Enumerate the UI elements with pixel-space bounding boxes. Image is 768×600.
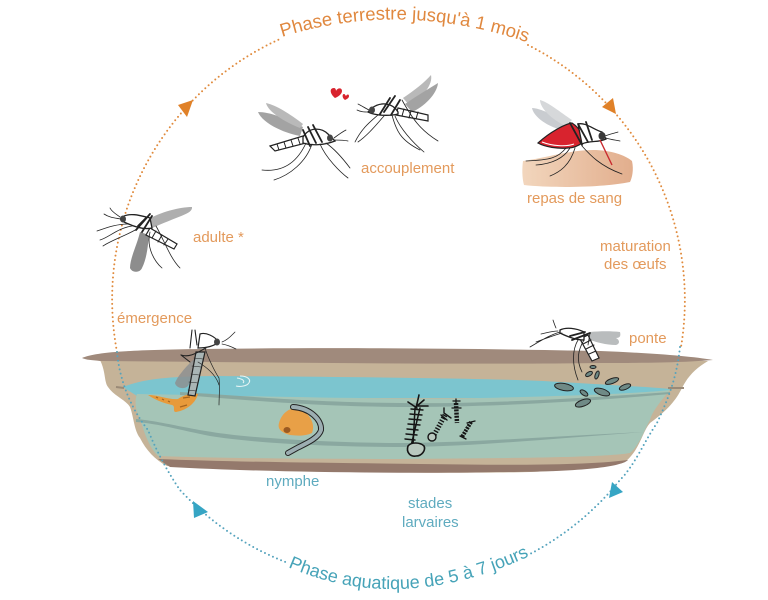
heading: aquatic phase: Phase aquatique de 5 à 7 jours [289, 548, 528, 593]
basin body [100, 360, 708, 473]
water surface [123, 376, 670, 398]
icon: mosquito left mating [258, 103, 350, 180]
label: maturation des œufs: maturation [600, 238, 671, 255]
basin lower edge [158, 459, 628, 473]
icon: mosquito adult [97, 207, 192, 272]
icon: mosquito laying eggs [530, 320, 620, 380]
arrow: orange top left [178, 100, 193, 117]
bank marks [116, 387, 684, 388]
larva medium [428, 408, 451, 441]
panel: water basin [82, 348, 713, 473]
aquatic phase dotted arc [117, 347, 680, 563]
basin rim [82, 348, 713, 364]
icon: water ripple [236, 376, 250, 386]
label: stades larvaires: larvaires [402, 514, 459, 531]
heading: terrestrial phase: Phase terrestre jusqu'à 1 mois [280, 6, 529, 42]
label: maturation des œufs: des œufs [604, 256, 667, 273]
icon: mosquito blood meal [526, 100, 622, 176]
icon: eggs [554, 366, 631, 409]
label: repas de sang: repas de sang [527, 190, 622, 207]
larva tiny [460, 421, 475, 439]
water shadow lower [136, 419, 644, 447]
larva small [452, 399, 461, 423]
arrow: orange top right [602, 98, 616, 114]
arrow: blue bottom left [193, 501, 208, 518]
label: émergence: émergence [117, 310, 192, 327]
terrestrial phase dotted arc [112, 39, 685, 352]
label: adulte: adulte * [193, 229, 244, 246]
label: nymphe: nymphe [266, 473, 319, 490]
label: stades larvaires [402, 495, 459, 531]
icon: small heart [343, 94, 349, 100]
water depth [136, 390, 670, 459]
water shadow upper [180, 392, 670, 407]
arrow: blue bottom right [609, 482, 623, 498]
icon: pupa nymph [279, 407, 321, 453]
label: ponte: ponte [629, 330, 667, 347]
icon: mosquito emerging [175, 330, 236, 405]
label: maturation des œufs [600, 238, 671, 273]
label: stades larvaires: stades [408, 495, 452, 512]
larva large [405, 395, 428, 456]
icon: pupal case [148, 394, 198, 412]
icon: skin [522, 150, 633, 187]
icon: large heart [331, 88, 342, 98]
icon: mosquito right mating [355, 75, 438, 152]
icon: larvae [405, 395, 475, 456]
label: accouplement: accouplement [361, 160, 455, 177]
